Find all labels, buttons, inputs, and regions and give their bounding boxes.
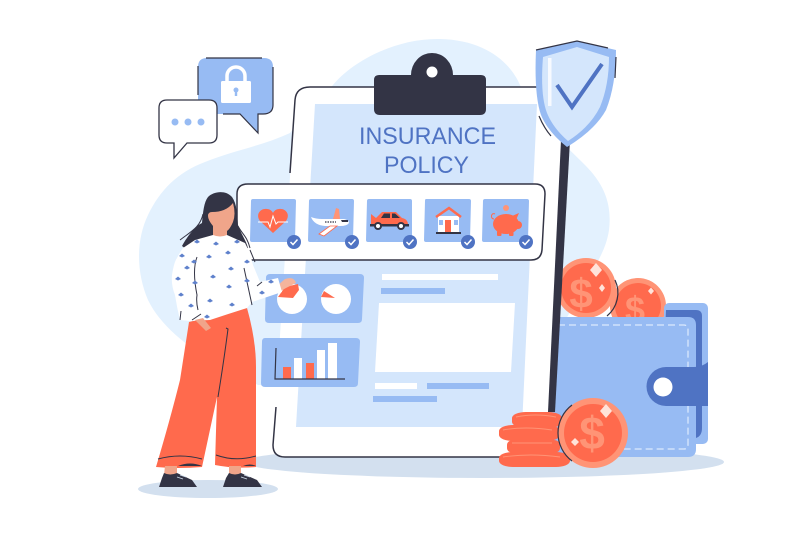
wallet xyxy=(548,303,708,457)
right shoe xyxy=(223,473,262,487)
background blob xyxy=(139,39,610,385)
icon: padlock xyxy=(221,67,251,103)
title xyxy=(359,123,496,179)
shield check mark xyxy=(557,64,602,107)
document content lines xyxy=(373,274,515,402)
coin stack xyxy=(499,412,570,467)
figure shadow xyxy=(138,480,278,498)
icon: piggy bank xyxy=(482,199,529,242)
coverage banner xyxy=(237,184,545,260)
coins behind wallet: $ xyxy=(569,270,593,317)
front coin xyxy=(558,398,628,468)
ground shadow xyxy=(244,446,724,478)
clipboard clip xyxy=(374,53,486,115)
shield xyxy=(536,41,616,147)
clipboard right edge xyxy=(548,140,570,412)
speech bubble: typing xyxy=(159,100,217,158)
hand on chart xyxy=(277,278,296,292)
sweater xyxy=(172,235,282,321)
wallet strap xyxy=(646,362,708,406)
title: POLICY xyxy=(384,152,469,179)
icon: health heart xyxy=(250,199,296,242)
sweater pattern xyxy=(175,240,274,318)
icon: car xyxy=(366,199,412,242)
icon: house xyxy=(424,199,471,242)
left shoe xyxy=(159,473,197,487)
icon: travel plane xyxy=(308,199,354,242)
coins behind wallet: $ xyxy=(625,289,645,330)
speech bubble: lock xyxy=(198,58,273,133)
front coin: $ xyxy=(579,407,605,459)
pants xyxy=(156,308,256,468)
bar chart panel xyxy=(261,338,360,387)
woman xyxy=(156,192,296,487)
hair xyxy=(182,192,248,252)
pie charts panel xyxy=(265,274,364,323)
coins behind wallet xyxy=(556,258,666,334)
clipboard inner sheet xyxy=(296,104,537,427)
check badges xyxy=(287,235,533,249)
face and neck xyxy=(208,203,234,240)
title: INSURANCE xyxy=(359,123,496,150)
hand in pocket xyxy=(195,318,211,331)
clipboard xyxy=(273,53,570,457)
ankles xyxy=(164,466,241,475)
